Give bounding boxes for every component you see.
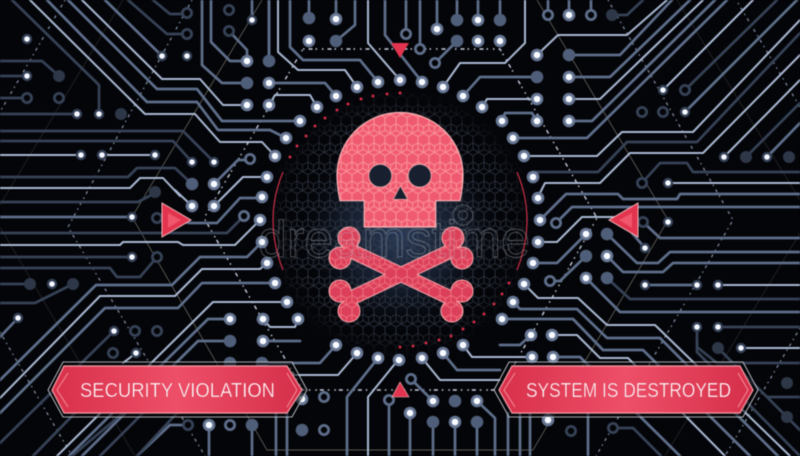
banner: security violation — [48, 362, 307, 417]
red arc: right — [517, 172, 527, 270]
banner: system is destroyed — [494, 362, 758, 417]
banner: security violation: SECURITY VIOLATION — [80, 380, 275, 402]
red dot arc: lower right — [398, 282, 510, 348]
crossbones — [330, 228, 472, 322]
circuit traces: upper right — [513, 0, 800, 197]
skull — [337, 113, 463, 227]
arrow: bottom triangle — [392, 382, 409, 397]
arrow: right triangle — [609, 203, 638, 237]
circuit traces: bottom — [33, 345, 661, 456]
circuit traces: left middle — [0, 193, 300, 456]
banner: system is destroyed: SYSTEM IS DESTROYED — [526, 380, 731, 402]
arrow: left triangle — [162, 203, 191, 237]
arrow: top triangle — [391, 43, 409, 58]
central hexagon mesh disc — [265, 90, 535, 360]
circuit traces: upper left — [0, 0, 336, 206]
watermark: dreamstime — [258, 211, 530, 269]
circuit traces: top centre — [269, 0, 667, 121]
circuit traces: right middle — [500, 194, 800, 456]
red dot arc: upper left — [288, 92, 402, 158]
red arc: left — [273, 172, 283, 270]
